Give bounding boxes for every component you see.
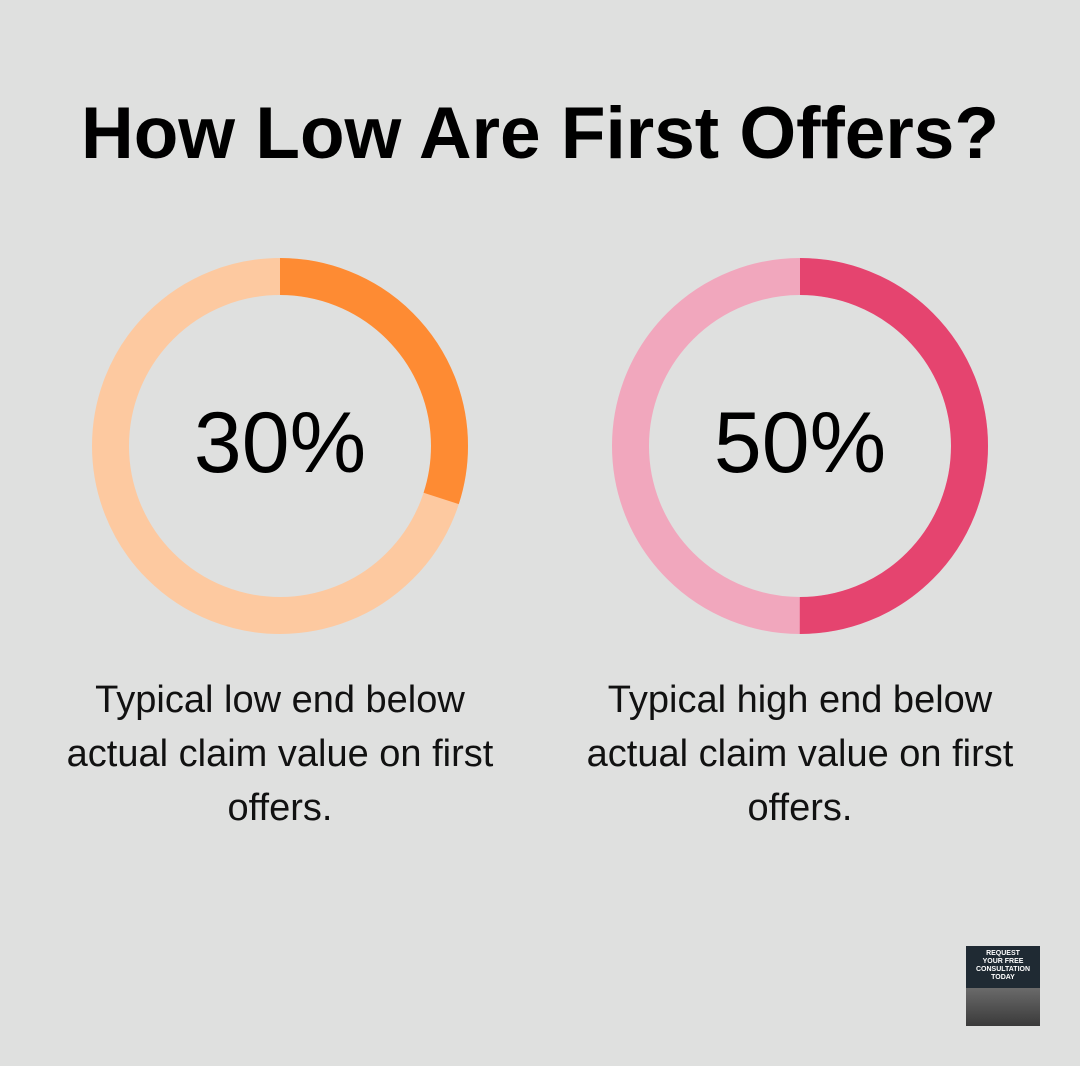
donut: 50% [630,276,970,616]
donut: 50%: 50% [714,395,886,491]
caption left: Typical low end below [95,679,465,721]
badge: consultation: REQUEST [986,950,1020,957]
caption left: actual claim value on first [67,733,493,775]
badge: consultation: TODAY [991,974,1015,981]
badge: consultation [966,946,1040,1026]
badge: consultation: YOUR FREE [983,958,1023,965]
caption right: Typical high end below [608,679,992,721]
caption right [587,679,1014,829]
caption left: offers. [228,787,332,829]
title: How Low Are First Offers? [81,93,999,174]
donut: 30% [110,276,450,616]
caption left [67,679,494,829]
caption right: offers. [748,787,852,829]
donut: 30%: 30% [194,395,366,491]
caption right: actual claim value on first [587,733,1013,775]
badge: consultation: CONSULTATION [976,966,1030,973]
